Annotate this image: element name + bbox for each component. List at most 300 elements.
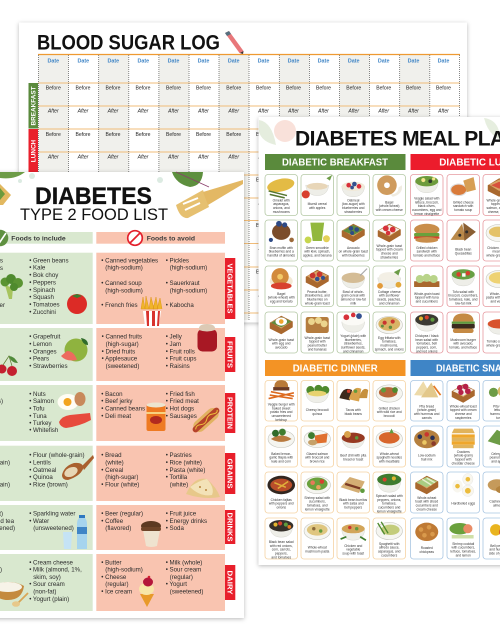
- card: muesli: with apples: [309, 206, 326, 210]
- card: bran muffin: Bran muffin with: [270, 246, 293, 250]
- tab: vegetables: VEGETABLES: [226, 264, 232, 314]
- card: green smoothie: apples, and banana: [303, 253, 332, 257]
- after readings row: After: [77, 108, 89, 114]
- card: bagel: with cream cheese: [376, 208, 403, 212]
- card: mushroom burger: with avocado,: [453, 342, 473, 346]
- avoid list: • Beef jerky: [101, 398, 133, 405]
- card: bowl of cereal: [337, 266, 370, 306]
- card: chicken fajitas: onions: [276, 505, 286, 509]
- after readings row: [47, 108, 449, 114]
- avoid list: • Cereal: [101, 467, 123, 474]
- include list: • Lemon: [29, 341, 52, 348]
- lunch readings: Before: [256, 132, 271, 138]
- date labels: Date: [438, 58, 449, 64]
- card: pita bread: [410, 380, 443, 421]
- include list: • Cream cheese: [29, 559, 74, 566]
- card: cheesy broccoli quinoa: Cheesy broccoli: [306, 408, 329, 412]
- card: spaghetti alfredo: asparagus, and: [378, 550, 401, 554]
- card: veggie burger: potato fries and: [270, 410, 293, 414]
- card: veggie salad: cucumbers, egg and: [412, 208, 442, 212]
- after readings row: After: [347, 108, 359, 114]
- decorative top: leaves and toast: [0, 172, 209, 205]
- card: cottage cheese: seeds, peaches,: [377, 298, 401, 302]
- card: glazed salmon: Glazed salmon: [306, 452, 328, 456]
- include list: • Grapefruit: [29, 334, 61, 341]
- include list: • Turkey: [29, 420, 52, 427]
- lunch readings: After: [167, 155, 179, 161]
- section header: breakfast: DIABETIC BREAKFAST: [282, 158, 389, 169]
- avoid list: • Pastries: [166, 452, 192, 459]
- card: toast with egg: avocado: [275, 345, 288, 349]
- lunch readings: Before: [105, 132, 121, 138]
- card: veggie burger: [265, 380, 298, 422]
- card: cottage cheese: with sunflower: [379, 294, 400, 298]
- tab: drinks: [225, 510, 235, 544]
- card: cheesy broccoli quinoa: quinoa: [312, 412, 322, 416]
- card: shrimp salad: cucumbers,: [309, 500, 326, 504]
- include list: • Lentils: [29, 460, 51, 466]
- date labels: Date: [198, 58, 209, 64]
- panel: blood sugar log sheet: [19, 22, 467, 322]
- card: chicken sandwich: sandwich with: [417, 250, 437, 254]
- card: black bean salad: corn, carrots,: [272, 548, 291, 552]
- icon: eggs and salmon: [58, 392, 91, 428]
- before readings row: Before: [166, 86, 181, 92]
- card: bran muffin: handful of almonds: [268, 253, 295, 257]
- panel: diabetes meal plan sheet: [258, 117, 500, 565]
- after readings row: After: [317, 108, 329, 114]
- card: beef chili: bread or toast: [343, 458, 363, 462]
- card: strawberry toast: [373, 220, 406, 261]
- include list: • Sour cream: [29, 581, 65, 588]
- after readings row: After: [197, 108, 209, 114]
- date labels: Date: [348, 58, 360, 64]
- before readings row: Before: [256, 86, 271, 92]
- after readings row: After: [47, 108, 59, 114]
- lunch readings: Before: [196, 132, 211, 138]
- card: black bean salad: and tomatoes: [271, 555, 291, 559]
- before readings row: Before: [135, 86, 151, 92]
- avoid list: • Canned soup: [101, 280, 142, 287]
- avoid list: • Milk (whole): [166, 559, 202, 566]
- card: bagel: Bagel: [385, 200, 394, 204]
- avoid list: • Fried meat: [166, 398, 199, 405]
- tab: lunch: LUNCH: [30, 139, 38, 162]
- avoid list: (regular): [170, 574, 193, 581]
- avoid list: • Pasta (white): [166, 467, 205, 474]
- card: raspberry toast: raspberries: [455, 416, 472, 420]
- icon: water bottle and glass: [63, 515, 87, 549]
- avoid list: • Hot dogs: [166, 406, 194, 412]
- card: roasted chickpeas: Roasted: [421, 546, 433, 550]
- date labels: [47, 58, 449, 64]
- card: baked tilapia: kale and corn: [271, 459, 291, 463]
- card: yogurt: [337, 312, 370, 353]
- card: black bean salad lunch: tomatoes, bell: [417, 342, 437, 346]
- avoid list: • Bread: [101, 452, 122, 459]
- tab: protein: [225, 393, 235, 433]
- card: frittata: [373, 312, 406, 353]
- card: bran muffin: [265, 220, 298, 261]
- avoid list: • Soda: [166, 525, 184, 532]
- after readings row: After: [257, 108, 269, 114]
- card: veggie salad: Veggie salad with: [414, 196, 440, 200]
- card: veggie salad: black olives,: [418, 204, 436, 208]
- row: fruits: [0, 324, 225, 381]
- card: black bean salad: with red onions,: [270, 544, 293, 548]
- card: salmon toast: [483, 174, 500, 216]
- card: grilled chicken: [373, 380, 406, 421]
- card: tomato soup: [483, 312, 500, 353]
- card: tacos: Tacos with: [346, 408, 361, 412]
- card: black bean quesadillas: [447, 220, 480, 261]
- card: veggie burger: Veggie burger with: [268, 402, 295, 406]
- card: toast with egg: with egg and: [272, 342, 291, 346]
- lunch readings: Before: [75, 132, 91, 138]
- before readings row: Before: [346, 86, 361, 92]
- card: mushroom burger: [447, 312, 480, 353]
- avoid list: (white): [170, 482, 188, 488]
- card: avocado toast: [337, 220, 370, 261]
- avoid list: • Bacon: [101, 391, 123, 398]
- icon: coffee cup: [141, 521, 161, 547]
- tab: fruits: FRUITS: [226, 341, 232, 368]
- include list: • Water: [29, 518, 49, 525]
- card: cucumber toast: [410, 472, 443, 513]
- avoid list: • Canned vegetables: [101, 257, 158, 264]
- include list: • Tuna: [29, 413, 47, 420]
- section header: snacks: [410, 360, 500, 376]
- card: bean burritos: Black bean burritos: [339, 498, 368, 502]
- card: peanut butter toast: strawberries, and: [305, 294, 330, 298]
- card: mushroom pasta: mushroom pasta: [305, 550, 330, 554]
- card: avocado toast: Avocado: [347, 246, 360, 250]
- card: pita bread: (whole-grain): [417, 408, 436, 412]
- date labels: Date: [408, 58, 419, 64]
- avoid list: (sweetened): [170, 588, 203, 596]
- card: spinach salad: peppers, onions,: [377, 498, 401, 502]
- card: hardboiled eggs: Hardboiled eggs: [451, 502, 475, 506]
- card: shrimp salad: lemon vinaigrette: [305, 507, 330, 511]
- after readings row: After: [407, 108, 419, 114]
- include list: • Spinach: [29, 287, 56, 294]
- card: trail mix: [410, 426, 443, 467]
- card: trail mix: trail mix: [421, 458, 433, 462]
- card: toast with tuna: and cucumbers: [416, 299, 438, 303]
- card: beef chili: [337, 426, 370, 467]
- card: oatmeal: Oatmeal: [347, 198, 360, 202]
- card: spaghetti meatballs: with meatballs: [379, 459, 400, 463]
- card: spaghetti alfredo: alfredo sauce,: [379, 546, 400, 550]
- card: yogurt: blueberries,: [345, 338, 362, 342]
- card: cucumber toast: Whole-wheat: [417, 496, 436, 500]
- card: tofu salad: broccoli, cucumbers,: [448, 294, 478, 298]
- card: toast with tuna: Whole-grain toast: [414, 292, 440, 296]
- card: frittata: spinach, and onions: [375, 347, 404, 351]
- icon: jam jar: [198, 324, 217, 352]
- avoid list: • Pickles: [166, 257, 189, 264]
- after readings row: After: [107, 108, 119, 114]
- card: bagel: [373, 174, 406, 216]
- card: banana toast: Whole-grain toast: [305, 336, 330, 340]
- lunch readings: After: [107, 155, 119, 161]
- card: green smoothie: with kiwi, spinach,: [304, 250, 330, 254]
- lunch readings: Before: [46, 132, 61, 138]
- icon: tomato: [67, 294, 87, 314]
- column header: foods to avoid: [96, 231, 225, 245]
- log grid: [38, 54, 460, 320]
- card: banana toast: topped with: [309, 340, 326, 344]
- card: yogurt: Yogurt (plain) with: [340, 334, 366, 338]
- card: raspberry toast: cheese and: [455, 412, 472, 416]
- card: bowl of cereal: grain cereal with: [341, 294, 365, 298]
- include list: (non-fat): [33, 588, 56, 596]
- avoid list: • Dried fruits: [102, 348, 135, 355]
- avoid list: [101, 452, 205, 488]
- tab: breakfast: BREAKFAST: [30, 86, 38, 126]
- include list: • Tofu: [29, 406, 45, 412]
- card: frittata: mushrooms,: [380, 344, 398, 348]
- card: tacos: black beans: [345, 412, 362, 416]
- card: chicken sandwich: Grilled chicken: [416, 246, 438, 250]
- card: oatmeal: (low-sugar) with: [342, 202, 365, 206]
- card: peanut butter toast: blueberries on: [307, 298, 328, 302]
- avoid list: (high-sodium): [170, 287, 207, 294]
- tab: fruits: [225, 337, 235, 372]
- include list: • Kale: [29, 265, 46, 272]
- icon: hot dog: [189, 404, 223, 436]
- lunch readings: After: [77, 155, 89, 161]
- avoid list: • Fried fish: [166, 391, 195, 398]
- card: spinach salad: tomatoes,: [382, 502, 396, 506]
- card: frittata: tomatoes,: [382, 340, 396, 344]
- lunch readings: After: [47, 155, 59, 161]
- card: strawberry toast: cheese and: [381, 252, 398, 256]
- before readings row: Before: [286, 86, 301, 92]
- date labels: Date: [77, 58, 89, 64]
- card: chicken sandwich: tomato and lettuce: [413, 253, 440, 257]
- card: grilled chicken: with wild rice and: [377, 410, 402, 414]
- avoid list: • Sour cream: [166, 566, 201, 574]
- avoid list: • Rice (white): [166, 460, 202, 466]
- card: veggie burger: ketchup: [276, 418, 287, 422]
- avoid list: (white): [105, 460, 124, 466]
- card: bowl of cereal: almond or low-fat: [341, 298, 366, 302]
- before readings row: Before: [75, 86, 91, 92]
- card: toast with tuna: [410, 266, 443, 306]
- lunch readings: After: [257, 292, 269, 298]
- avoid list: • Tortilla: [166, 474, 188, 481]
- icon: wooden scoop with grains: [62, 455, 94, 480]
- avoid list: • Canned beans: [101, 406, 145, 412]
- card: spinach salad: Spinach salad with: [376, 494, 403, 498]
- include list: • Oranges: [29, 348, 57, 355]
- card: mushroom pasta: [301, 518, 334, 559]
- after readings row: After: [137, 108, 149, 114]
- card: black bean salad lunch: bean salad with: [415, 338, 438, 342]
- card: crackers: cheddar cheese: [452, 461, 475, 465]
- include list: [0, 559, 82, 603]
- section header: dinner: [265, 360, 406, 376]
- card: bean burritos: [337, 472, 370, 513]
- card: spaghetti meatballs: Whole-wheat: [380, 452, 399, 456]
- avoid list: (high-sugar): [106, 341, 139, 348]
- include list: • Zucchini: [29, 309, 56, 316]
- include list: [29, 334, 68, 370]
- card: bran muffin: blueberries and a: [269, 250, 294, 254]
- lunch readings: Before: [256, 178, 271, 184]
- avoid list: • Deli meat: [101, 413, 131, 420]
- card: glazed salmon: brown rice: [310, 459, 325, 463]
- column header: foods to include: Foods to include: [11, 236, 66, 242]
- card: grilled chicken: broccoli: [384, 414, 395, 418]
- card: grilled cheese: tomato soup: [454, 208, 472, 212]
- avoid list: • Ice cream: [101, 588, 132, 596]
- card: omelet: [265, 174, 298, 216]
- card: muesli: Muesli cereal: [308, 202, 327, 206]
- avoid list: • Beer (regular): [101, 510, 143, 518]
- card: banana toast: and bananas: [308, 347, 327, 351]
- card: toast with tuna: topped with tuna: [415, 296, 439, 300]
- include list: (unsweetened): [33, 525, 74, 532]
- card: shrimp salad: [301, 472, 334, 513]
- card: green smoothie: [301, 220, 334, 261]
- card: spaghetti alfredo: [373, 518, 406, 559]
- tab: protein: PROTEIN: [226, 397, 232, 429]
- card: black bean salad: peppers,: [275, 551, 288, 555]
- card: grilled chicken: Grilled chicken: [379, 406, 400, 410]
- card: tofu salad: Tofu salad with: [452, 290, 474, 294]
- card: veggie salad: [410, 174, 443, 216]
- avoid list: • Fruit rolls: [166, 348, 195, 355]
- card: tofu salad: tomatoes, kale, and: [449, 298, 478, 302]
- card: raspberry toast: [447, 380, 480, 421]
- card: peanut butter toast: [301, 266, 334, 306]
- icon: canned beans: [146, 402, 166, 431]
- icon: bowl of sour cream: [0, 582, 28, 607]
- title: blood sugar log: BLOOD SUGAR LOG: [37, 32, 220, 54]
- avoid list: (high-sodium): [105, 265, 143, 272]
- icon: broccoli: [0, 274, 23, 299]
- card: black bean salad lunch: [410, 312, 443, 353]
- date labels: Date: [258, 58, 269, 64]
- card: roasted chickpeas: chickpeas: [420, 550, 434, 554]
- date labels: Date: [137, 58, 149, 64]
- card: peanut butter toast: Peanut butter,: [307, 290, 328, 294]
- card: shrimp cocktail: and lemon: [456, 553, 471, 557]
- panel: type 2 food list sheet: [0, 172, 244, 618]
- card: oatmeal: strawberries: [344, 210, 362, 214]
- card: cottage cheese: [373, 266, 406, 306]
- card: black bean quesadillas: Quesadillas: [455, 252, 472, 256]
- card: oatmeal: blueberries and: [342, 206, 365, 210]
- card: crackers: topped with: [455, 458, 472, 462]
- row: protein: [0, 385, 225, 441]
- card: banana toast: [301, 312, 334, 353]
- before readings row: [46, 86, 451, 92]
- avoid list: • Kabocha: [166, 302, 194, 309]
- lunch readings: Before: [166, 132, 181, 138]
- card: veggie burger: unsweetened: [272, 414, 291, 418]
- card: cucumber toast: toast with sliced: [415, 500, 438, 504]
- card: pita bread: Pita bread: [419, 404, 434, 408]
- include list: • Bok choy: [29, 272, 59, 279]
- card: bean burritos: bell peppers: [344, 505, 362, 509]
- icon: tortillas: [186, 479, 220, 498]
- card: raspberry toast: topped with cream: [450, 408, 477, 412]
- card: crackers: [447, 426, 480, 467]
- card: peanut butter toast: whole-grain toast: [305, 301, 330, 305]
- include list: • Sparkling water: [29, 510, 75, 518]
- lunch readings: Before: [256, 270, 271, 276]
- card: hardboiled eggs: [447, 472, 480, 513]
- card: chicken soup: soup with toast: [342, 551, 364, 555]
- card: trail mix: Low-sodium: [418, 454, 436, 458]
- card: chicken fajitas: Chicken fajitas: [271, 498, 292, 502]
- before readings row: Before: [196, 86, 211, 92]
- include list: • Strawberries: [29, 363, 68, 370]
- card: omelet: asparagus,: [273, 202, 289, 206]
- card: baked tilapia: [265, 426, 298, 467]
- include list: skim, soy): [33, 574, 61, 581]
- card: avocado toast: with blueberries: [342, 253, 365, 257]
- card: glazed salmon: with broccoli and: [305, 456, 330, 460]
- card: tofu salad: low-fat milk: [455, 301, 472, 305]
- avoid list: • Flour (white): [101, 482, 139, 488]
- card: tofu salad: [447, 266, 480, 306]
- card: crackers: (whole-grain): [454, 454, 473, 458]
- card: cashews: [483, 472, 500, 513]
- avoid list: • Sausages: [166, 413, 197, 420]
- include list: • Nuts: [29, 391, 46, 398]
- card: spaghetti alfredo: cucumbers: [381, 553, 398, 557]
- decorative faded produce: [259, 118, 500, 145]
- avoid list: • French fries: [101, 302, 138, 309]
- section header: lunch: [410, 154, 500, 170]
- card: baked tilapia: Baked lemon-: [271, 452, 291, 456]
- card: chicken fajitas: with peppers and: [269, 502, 294, 506]
- include list: • Flour (whole-grain): [29, 452, 85, 459]
- card: shrimp salad: Shrimp salad with: [304, 496, 330, 500]
- row: grains: [0, 446, 225, 501]
- card: bowl of cereal: milk: [350, 301, 357, 305]
- card: cucumber toast: cream cheese: [417, 507, 437, 511]
- card: wheat pasta: [483, 266, 500, 306]
- card: grilled cheese: Grilled cheese: [453, 200, 474, 204]
- card: banana toast: peanut butter: [308, 344, 328, 348]
- card: glazed salmon: [301, 426, 334, 467]
- avoid list: (sweetened): [106, 363, 139, 370]
- include list: • Yogurt (plain): [29, 596, 69, 603]
- card: oatmeal: [337, 174, 370, 216]
- tab: grains: GRAINS: [226, 458, 232, 489]
- card: shrimp cocktail: with cucumbers,: [452, 546, 475, 550]
- lunch readings: Before: [226, 132, 241, 138]
- card: yogurt: and cinnamon: [343, 349, 364, 353]
- card: bagel: (whole-wheat): [379, 204, 399, 208]
- row: dairy: [0, 554, 225, 611]
- include list: • Peppers: [29, 280, 56, 286]
- avoid list: • Cheese: [101, 574, 127, 581]
- before readings row: Before: [46, 86, 61, 92]
- date labels: Date: [318, 58, 329, 64]
- avoid list: • Yogurt: [166, 581, 187, 588]
- card: green smoothie: Green smoothie: [306, 246, 329, 250]
- avoid list: • Canned fruits: [102, 334, 142, 341]
- card: bagel with egg: Bagel: [277, 292, 286, 296]
- before readings row: Before: [316, 86, 331, 92]
- card: strawberry toast: topped with cream: [376, 248, 403, 252]
